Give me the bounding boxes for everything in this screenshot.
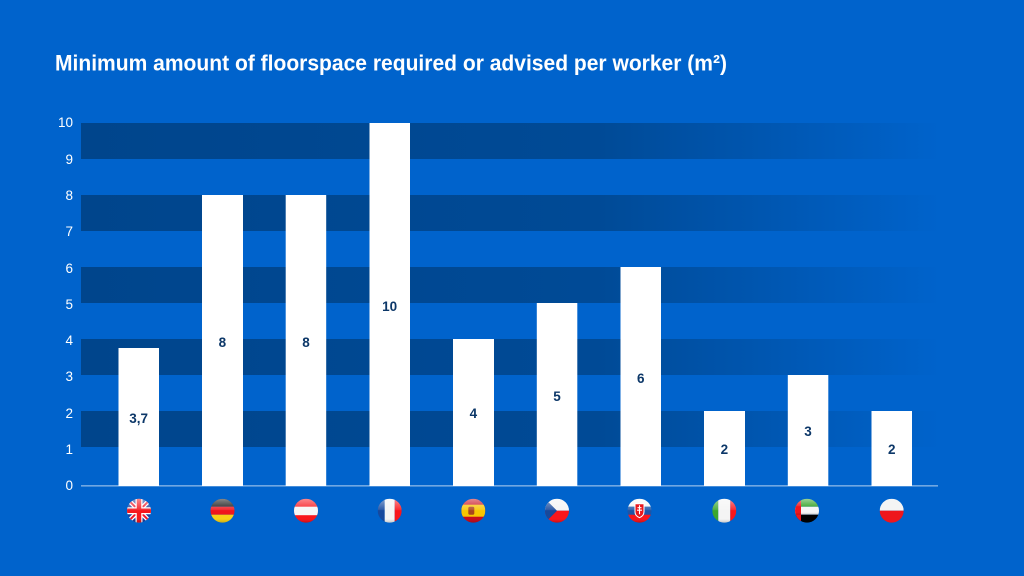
y axis labels: 9 <box>65 152 73 167</box>
y axis labels: 2 <box>65 406 73 421</box>
bar value labels: 3 <box>804 424 812 439</box>
y axis labels: 4 <box>65 333 73 348</box>
flag: Spain <box>461 499 485 523</box>
flag: United Arab Emirates <box>795 499 819 523</box>
bar value labels: 8 <box>219 335 227 350</box>
bar value labels: 8 <box>302 335 310 350</box>
bars <box>118 123 912 486</box>
flag: United Kingdom <box>127 499 151 523</box>
x axis line <box>81 485 938 486</box>
flag: Austria <box>294 499 318 523</box>
flag: France <box>378 499 402 523</box>
bar value labels: 2 <box>721 442 728 457</box>
y axis labels: 10 <box>58 115 73 130</box>
bar value labels: 6 <box>637 371 645 386</box>
background bands <box>81 123 940 447</box>
y axis labels: 5 <box>65 297 73 312</box>
flag: Germany <box>210 499 234 523</box>
flag: Poland <box>880 499 904 523</box>
title: Minimum amount of floorspace required or advised per worker (m²) <box>55 50 727 76</box>
flag: Italy <box>712 499 736 523</box>
infographic canvas <box>56 54 938 523</box>
bar value labels <box>129 299 895 457</box>
bar chart <box>58 115 940 493</box>
y axis labels: 6 <box>65 261 73 276</box>
y axis labels: 3 <box>65 369 73 384</box>
bar value labels: 3,7 <box>129 411 148 426</box>
bar value labels: 5 <box>553 389 561 404</box>
flags row <box>127 499 904 523</box>
bar value labels: 10 <box>382 299 397 314</box>
y axis labels: 1 <box>65 442 73 457</box>
y axis labels: 8 <box>65 188 73 203</box>
flag: Slovakia <box>628 499 652 523</box>
y axis labels <box>58 115 73 493</box>
y axis labels: 7 <box>65 224 73 239</box>
y axis labels: 0 <box>65 478 73 493</box>
bar value labels: 2 <box>888 442 895 457</box>
flag: Czech Republic <box>545 499 569 523</box>
bar value labels: 4 <box>470 406 478 421</box>
